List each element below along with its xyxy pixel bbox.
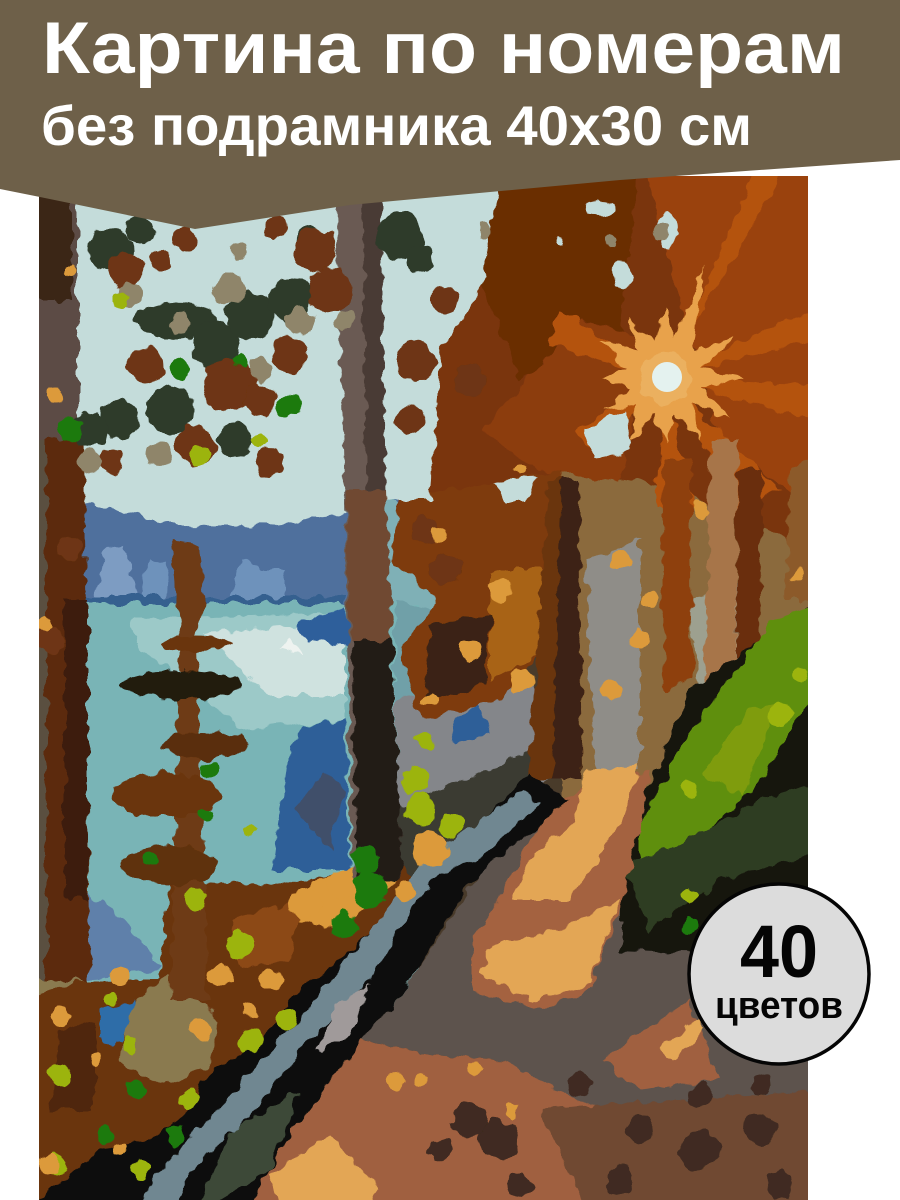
black shadow band and fallen log (0, 775, 570, 1200)
foliage blobs: green (58, 353, 698, 1145)
subtitle: без подрамника 40х30 см (41, 94, 752, 157)
foliage blobs: brown (36, 216, 486, 654)
foliage blobs: dark brown ground (429, 1073, 794, 1199)
main tree trunk (336, 190, 402, 880)
base underpainting (254, 656, 563, 1200)
lake (85, 600, 419, 1006)
small foreground tree (110, 540, 249, 1000)
green slope (626, 608, 808, 934)
brown ground and trail (230, 765, 830, 1200)
grey ground (361, 828, 808, 1106)
bottom left foliage (39, 866, 412, 1200)
painting: forest lake at sunset (39, 176, 808, 1200)
title: Картина по номерам (42, 8, 845, 89)
foliage blobs: dark (72, 211, 434, 458)
sun burst (600, 265, 745, 445)
badge label: цветов (715, 985, 843, 1027)
distant blue water patch (85, 890, 160, 978)
sun rays (548, 176, 808, 508)
badge: 40 colours (689, 884, 869, 1064)
right tree trunks (528, 440, 830, 780)
sky (74, 202, 439, 529)
orange tree canopy (390, 150, 830, 720)
blue cliff and grey slope (272, 600, 548, 877)
mountains (81, 498, 436, 610)
foliage blobs: orange (38, 263, 807, 1176)
left tree trunk (39, 196, 93, 983)
dark slope (618, 607, 808, 955)
sun core (652, 362, 682, 392)
header banner (0, 0, 900, 229)
foliage blobs: tan (79, 222, 668, 473)
badge number: 40 (740, 910, 818, 993)
sky gaps in canopy (384, 185, 678, 502)
right forest background (560, 471, 808, 798)
foliage blobs: lime (43, 292, 807, 1180)
